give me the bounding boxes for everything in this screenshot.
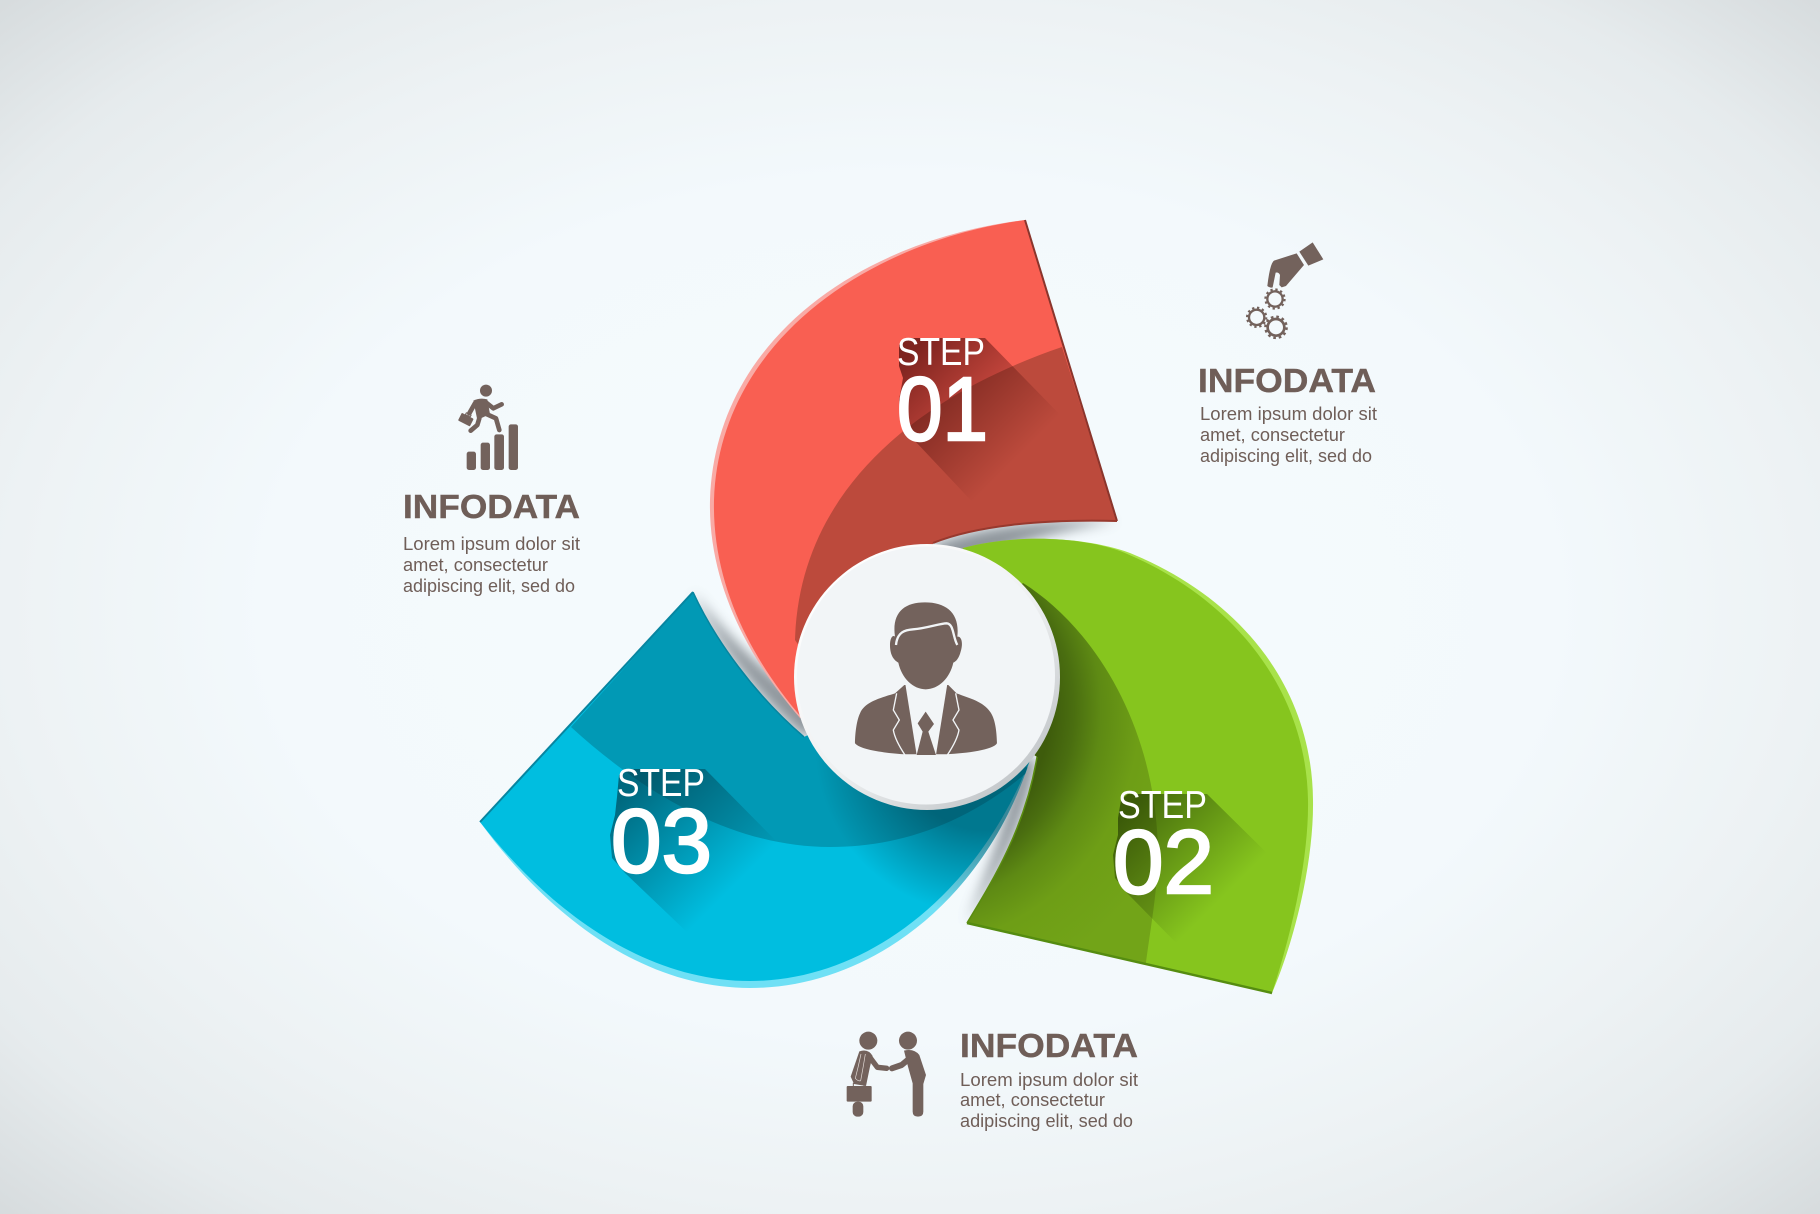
info block: right: Lorem ipsum dolor sit	[1200, 403, 1377, 424]
petal: step 01 red	[710, 220, 1117, 720]
icon: handshake	[847, 1032, 926, 1117]
step 02 label: STEP	[1118, 784, 1207, 827]
info block: right	[1198, 362, 1377, 466]
info block: left	[403, 488, 580, 596]
icon: hand placing gears	[1247, 242, 1323, 338]
info block: bottom: amet, consectetur	[960, 1089, 1105, 1110]
info block: right: adipiscing elit, sed do	[1200, 445, 1372, 466]
info block: bottom: INFODATA	[960, 1027, 1138, 1064]
info block: left: amet, consectetur	[403, 554, 548, 575]
info block: bottom: Lorem ipsum dolor sit	[960, 1069, 1138, 1090]
info block: bottom	[960, 1027, 1138, 1131]
petal: step 02 green	[927, 539, 1313, 993]
petal: step 03 teal	[480, 592, 1080, 988]
info block: right: INFODATA	[1198, 362, 1376, 399]
icon: businessman	[855, 602, 997, 755]
info block: right: amet, consectetur	[1200, 424, 1345, 445]
info block: left: INFODATA	[403, 488, 580, 525]
step 02 label: 02	[1113, 813, 1214, 913]
info block: left: adipiscing elit, sed do	[403, 575, 575, 596]
step 03 label: 03	[611, 792, 712, 892]
info block: left: Lorem ipsum dolor sit	[403, 533, 580, 554]
step 01 label: 01	[897, 360, 988, 460]
step 03 label: STEP	[617, 762, 705, 805]
icon: runner climbing bar chart	[458, 385, 518, 470]
center circle with businessman icon	[794, 544, 1060, 810]
petal shadows on background	[693, 521, 1117, 923]
info block: bottom: adipiscing elit, sed do	[960, 1110, 1133, 1131]
step 01 label: STEP	[897, 331, 985, 374]
